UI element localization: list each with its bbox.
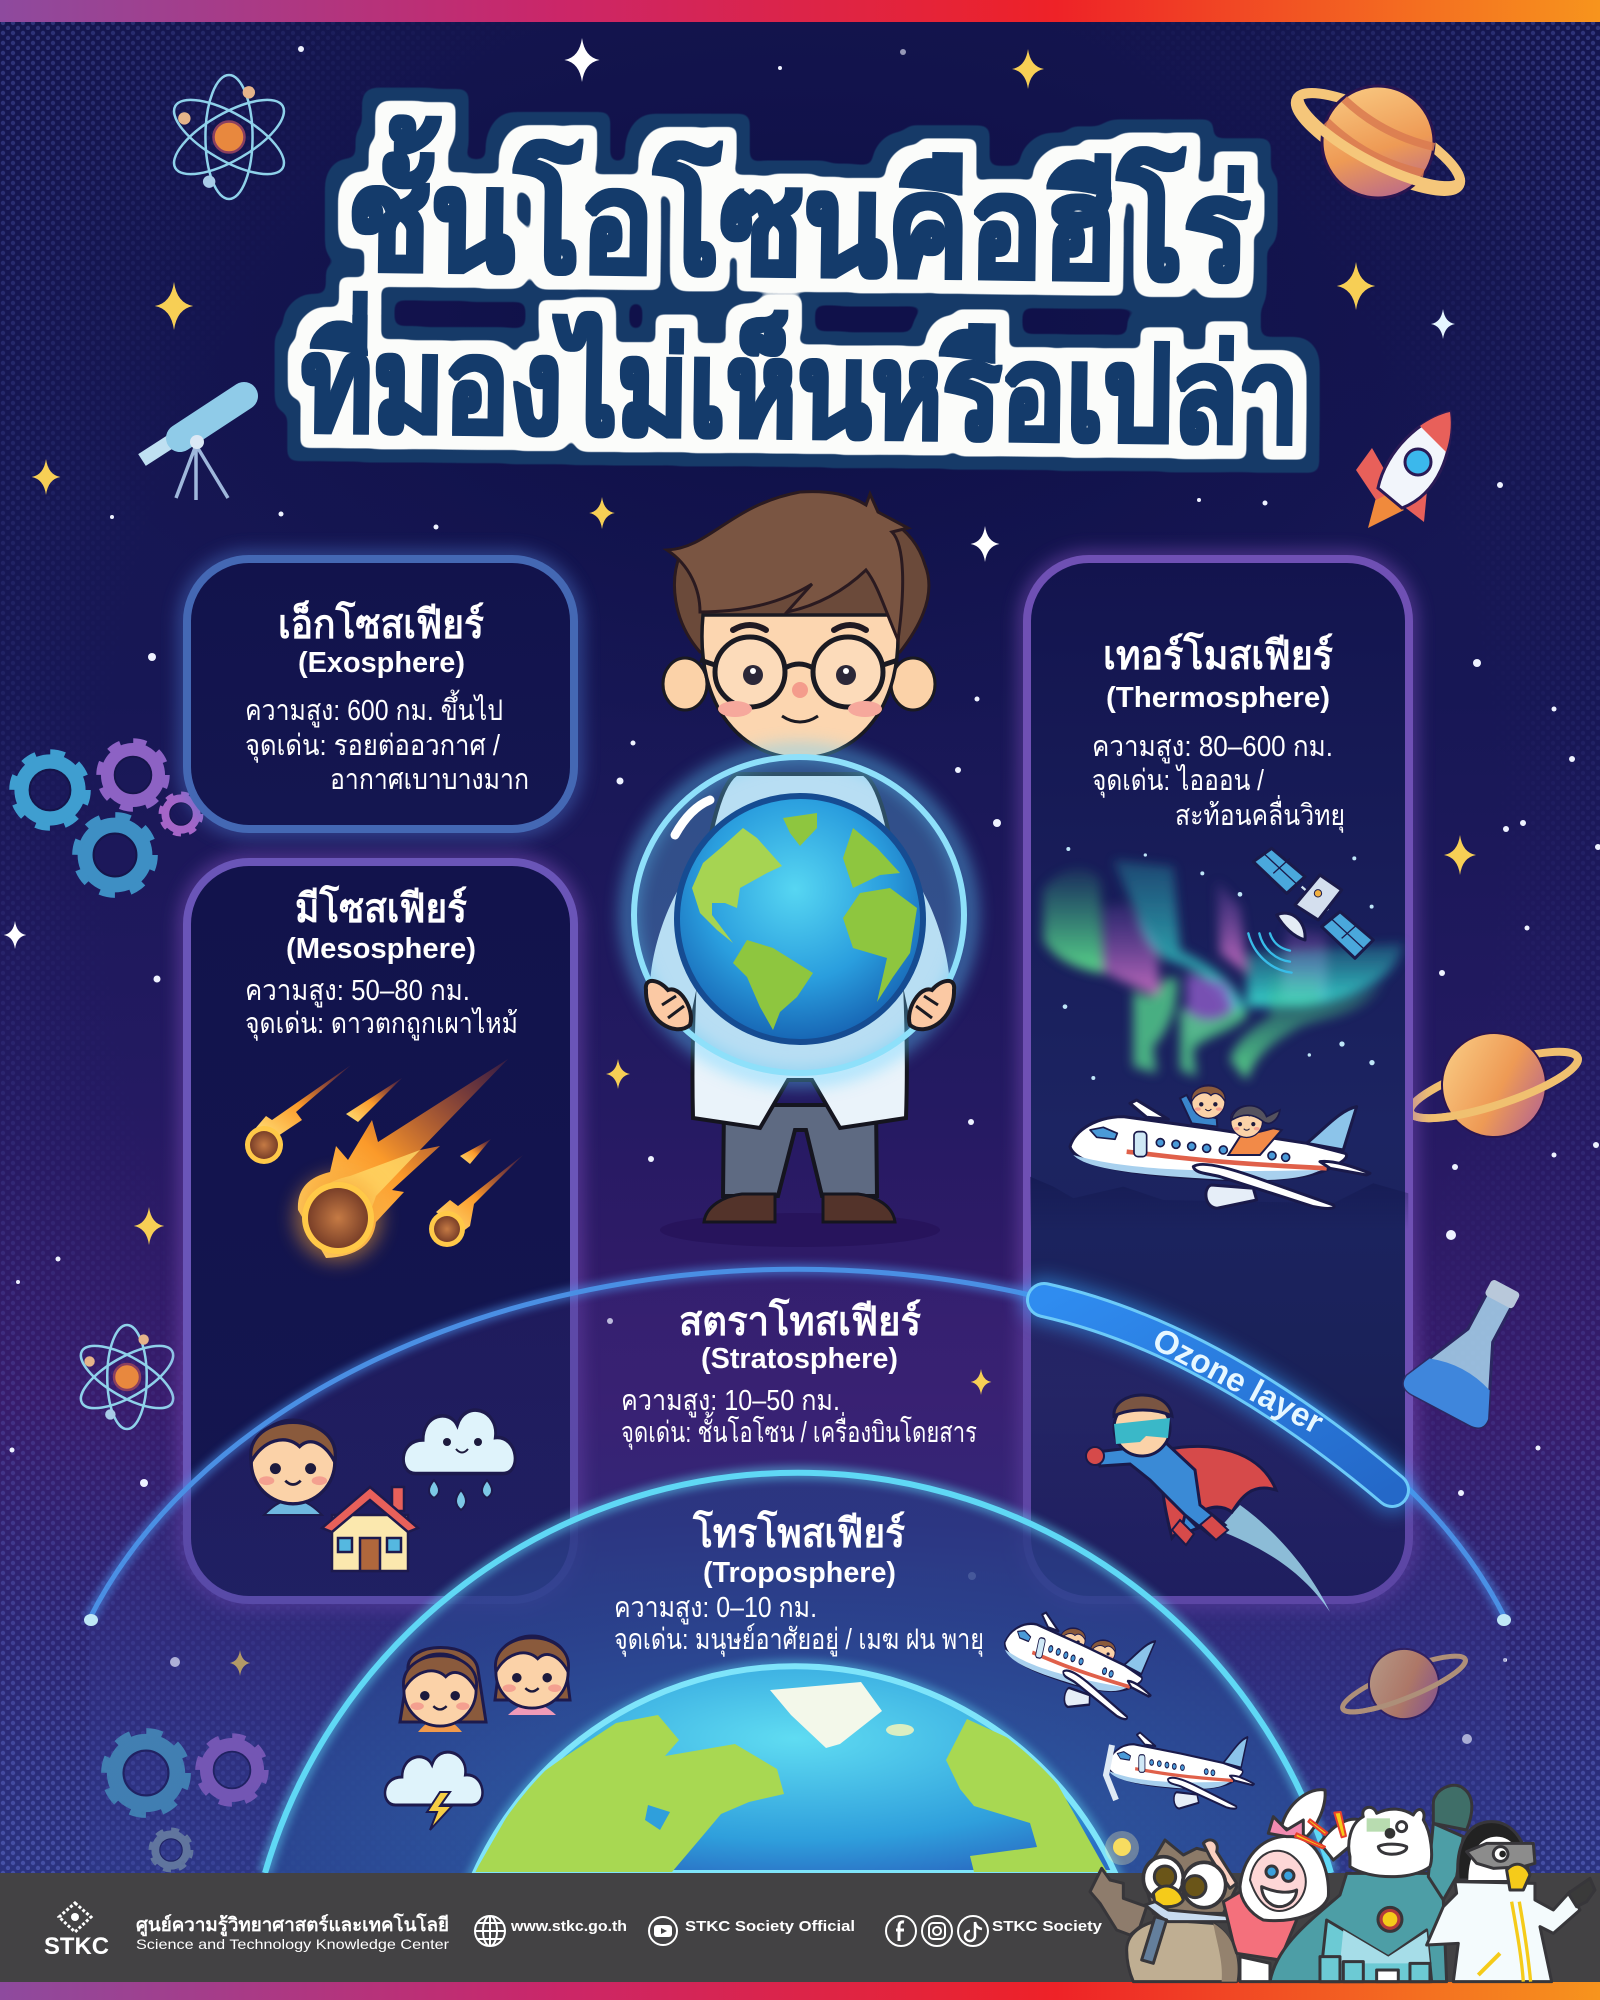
stratosphere region: [89, 1269, 1506, 1873]
mascot: rabbit: [1223, 1790, 1360, 1982]
icon: youtube: [649, 1917, 677, 1945]
icon: atom left: [72, 1325, 182, 1429]
illustration: happy rain cloud: [403, 1410, 515, 1510]
facts: exosphere: [245, 689, 529, 796]
footer band: [0, 1873, 1600, 1983]
english name: exosphere: (Exosphere): [298, 647, 465, 679]
troposphere dome: [265, 1473, 1331, 1873]
icon: gears lower left: [106, 1733, 265, 1870]
icon: telescope: [142, 396, 244, 500]
cape: [1162, 1446, 1276, 1538]
ears: [663, 658, 707, 710]
heading: exosphere: เอ็กโซสเฟียร์: [278, 599, 484, 647]
alert marks: [1295, 1812, 1346, 1848]
lab coat: [692, 774, 907, 1128]
english name: mesosphere: (Mesosphere): [286, 933, 476, 965]
logo: STKC: STKC: [44, 1933, 109, 1960]
illustration: house: [322, 1487, 418, 1571]
icon: gears left: [13, 742, 201, 894]
signal arcs: [1248, 933, 1292, 973]
illustration: meteors: [245, 1059, 523, 1262]
heading: thermosphere: เทอร์โมสเฟียร์: [1103, 632, 1333, 678]
facts: exosphere: จุดเด่น: รอยต่ออวกาศ /: [245, 730, 501, 763]
head: [1114, 1400, 1170, 1456]
icon: ringed planet top right: [1270, 49, 1486, 235]
youtube channel: STKC Society Official: [685, 1918, 855, 1935]
facts: thermosphere: ความสูง: 80–600 กม.: [1092, 731, 1333, 764]
heading: stratosphere: [621, 1298, 977, 1450]
facts: mesosphere: ความสูง: 50–80 กม.: [245, 975, 470, 1008]
face: [702, 615, 898, 758]
facts: thermosphere: จุดเด่น: ไอออน /: [1092, 763, 1265, 798]
organisation name: [136, 1913, 449, 1952]
arc: stratosphere boundary: [84, 1269, 1511, 1626]
footer mascots: [1090, 1785, 1595, 1982]
facts: exosphere: ความสูง: 600 กม. ขึ้นไป: [245, 689, 503, 728]
icons: facebook, instagram, tiktok: [886, 1916, 988, 1946]
social handle: STKC Society: [992, 1918, 1103, 1935]
hands: [646, 981, 954, 1029]
globe: [677, 796, 923, 1042]
fist: [1086, 1447, 1104, 1465]
satellite: [1253, 848, 1373, 958]
website: www.stkc.go.th: [510, 1918, 627, 1935]
illustration: earth at horizon: [475, 1666, 1115, 1873]
illustration: flying superhero: [1086, 1395, 1330, 1612]
facts: troposphere: ความสูง: 0–10 กม.: [614, 1592, 817, 1625]
body and arm: [1096, 1442, 1225, 1535]
english name: troposphere: (Troposphere): [703, 1557, 896, 1589]
illustration: storm cloud: [385, 1752, 482, 1830]
shoes: [704, 1194, 895, 1222]
mascot: bear: [1270, 1785, 1472, 1982]
panel: thermosphere: [1027, 559, 1409, 1600]
icon: atom top left: [164, 75, 294, 199]
facts: troposphere: จุดเด่น: มนุษย์อาศัยอยู่ / เมฆ ฝน พายุ: [614, 1623, 984, 1657]
trousers: [723, 1105, 877, 1196]
facts: thermosphere: [1092, 731, 1345, 833]
coat sleeves: [650, 860, 950, 1020]
title: [301, 115, 1301, 470]
illustration: propeller plane: [1106, 1733, 1254, 1809]
facts: thermosphere: สะท้อนคลื่นวิทยุ: [1175, 795, 1345, 833]
heading: troposphere: โทรโพสเฟียร์: [692, 1510, 905, 1556]
icon: gold star near stratosphere: [971, 1369, 991, 1395]
icon: glowing light bulb: [1105, 1831, 1139, 1865]
title: ที่มองไม่เห็นหรือเปล่า: [301, 291, 1301, 470]
fringe: [667, 492, 908, 640]
title: ชั้นโอโซนคือฮีโร่: [347, 115, 1251, 310]
icon: globe website: [475, 1916, 505, 1946]
facts: exosphere: อากาศเบาบางมาก: [330, 764, 529, 796]
mascot: owl: [1090, 1840, 1240, 1982]
eyes: [743, 665, 856, 685]
facts: troposphere: [614, 1592, 984, 1657]
footer gradient bar: [0, 1982, 1600, 2000]
nose, cheeks and smile: [718, 682, 882, 722]
girl on airplane: [1228, 1106, 1282, 1155]
speed trail: [1218, 1505, 1330, 1612]
english name: thermosphere: (Thermosphere): [1106, 682, 1330, 714]
icon: ringed planet lower right: [1330, 1627, 1478, 1741]
illustration: boy: [251, 1420, 335, 1515]
children on airplane: [1180, 1085, 1225, 1127]
english name: stratosphere: (Stratosphere): [701, 1343, 898, 1375]
top colour bar: [0, 0, 1600, 22]
airplane: [1070, 1100, 1370, 1208]
distant hills: [1030, 1177, 1408, 1230]
ozone layer label: Ozone layer: [1147, 1320, 1330, 1441]
icon: flask: [1400, 1264, 1547, 1431]
ground shadow: [660, 1213, 940, 1247]
organisation name: Science and Technology Knowledge Center: [136, 1936, 449, 1952]
hair back: [675, 500, 929, 652]
panel: exosphere: [187, 559, 574, 829]
icon: rocket: [1356, 412, 1451, 528]
heading: troposphere: [614, 1510, 984, 1657]
panel: mesosphere: [187, 862, 574, 1600]
facts: mesosphere: จุดเด่น: ดาวตกถูกเผาไหม้: [245, 1006, 518, 1041]
organisation name: ศูนย์ความรู้วิทยาศาสตร์และเทคโนโลยี: [136, 1913, 449, 1937]
facts: stratosphere: ความสูง: 10–50 กม.: [621, 1385, 840, 1418]
icon: ringed planet right: [1394, 1008, 1594, 1162]
aurora sparkles: [1063, 847, 1375, 1080]
eyebrows: [733, 625, 866, 630]
glasses: [700, 637, 898, 707]
illustration: scientist holding globe: [629, 492, 969, 1247]
illustration: two girls: [400, 1636, 570, 1732]
decorative stars: [4, 38, 1476, 1676]
illustration: aurora: [1030, 847, 1408, 1230]
heading: stratosphere: สตราโทสเฟียร์: [679, 1298, 921, 1344]
illustration: small airplane: [994, 1605, 1163, 1723]
facts: mesosphere: [245, 975, 518, 1041]
boots: [1172, 1515, 1228, 1545]
protective bubble: [629, 752, 969, 1078]
facts: stratosphere: [621, 1385, 977, 1450]
ozone layer band: [1044, 1300, 1392, 1490]
mascot: penguin: [1427, 1822, 1595, 1982]
heading: mesosphere: มีโซสเฟียร์: [295, 885, 467, 931]
facts: stratosphere: จุดเด่น: ชั้นโอโซน / เครื่องบินโดยสาร: [621, 1411, 977, 1450]
logo: STKC: [44, 1903, 109, 1960]
